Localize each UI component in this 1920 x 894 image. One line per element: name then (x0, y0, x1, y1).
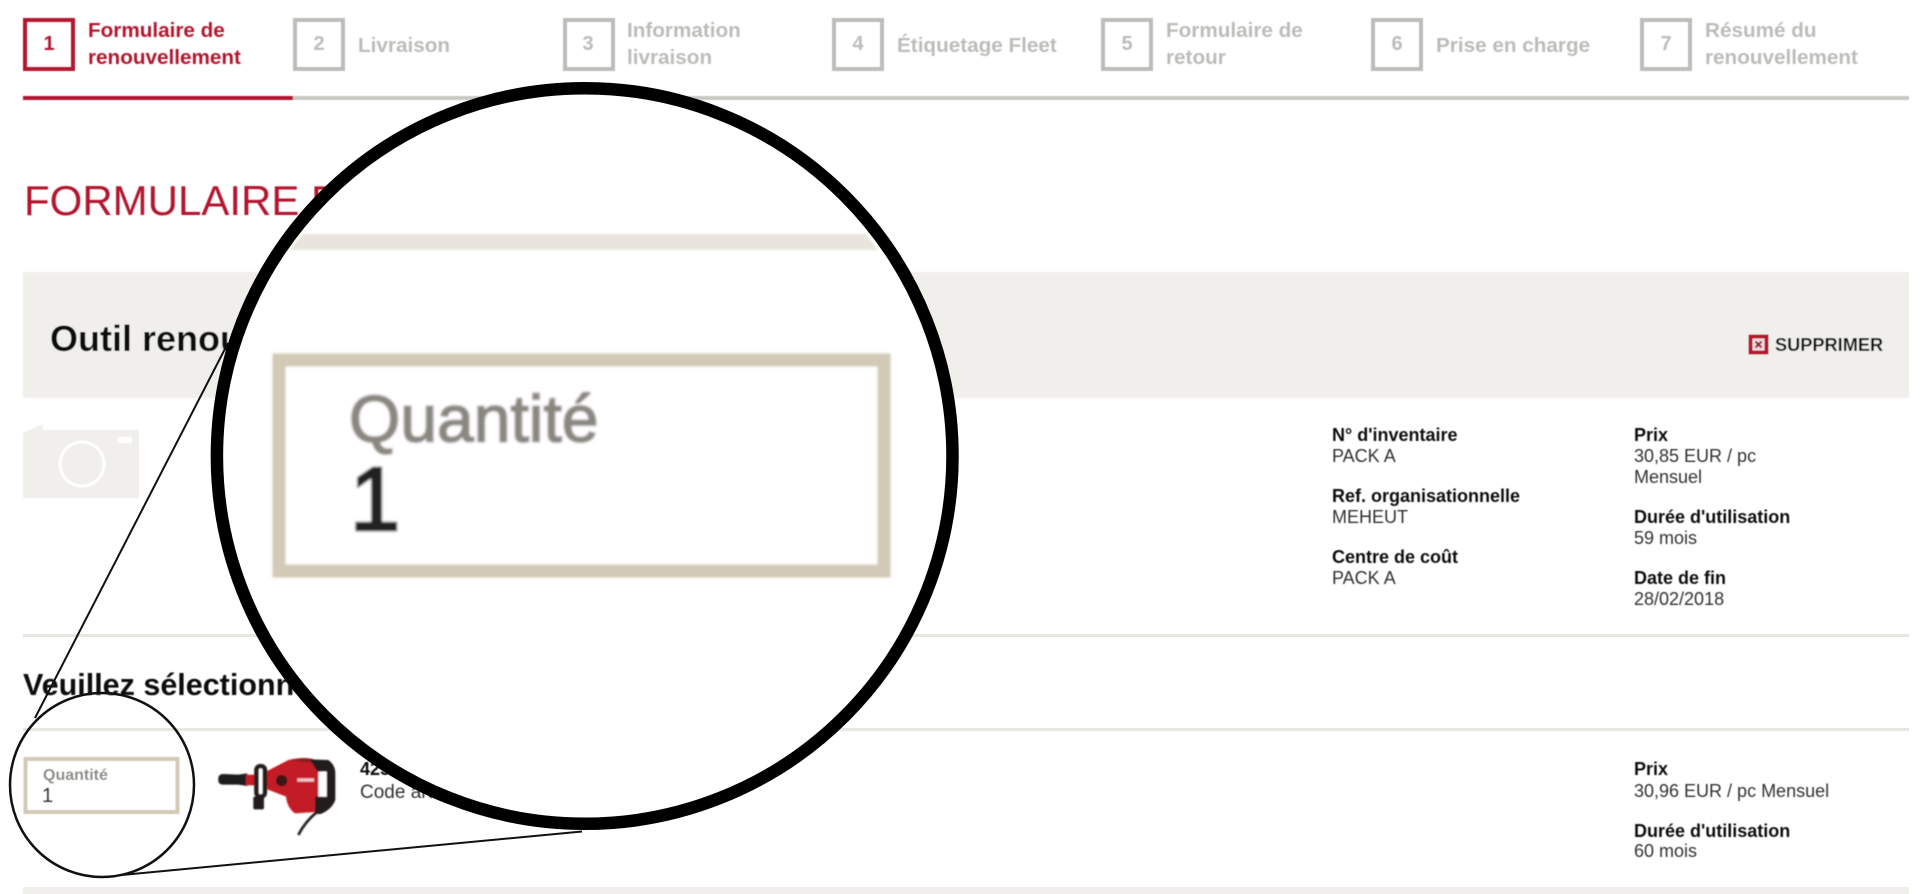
product price details: Durée d'utilisation (1634, 821, 1790, 841)
step 4 (834, 20, 1057, 69)
tool price column: Mensuel (1634, 467, 1702, 487)
step 6: 6 (1391, 33, 1403, 55)
tool details column: MEHEUT (1332, 507, 1408, 527)
tool price column: 30,85 EUR / pc (1634, 446, 1756, 466)
step 1 active: Formulaire de (88, 19, 225, 42)
quantity field (26, 759, 178, 812)
tool details column: Centre de coût (1332, 547, 1458, 567)
tool details column (1332, 425, 1520, 588)
tool details column: PACK A (1332, 568, 1396, 588)
product price details: Prix (1634, 759, 1668, 779)
panel: tool header (23, 272, 1909, 398)
step 1 active: 1 (43, 33, 55, 55)
small lens circle (10, 693, 194, 877)
section heading: Veuillez sélectionner (23, 668, 323, 702)
magnified quantity field: Quantité (349, 382, 598, 456)
step 5: retour (1166, 46, 1226, 69)
step 3: livraison (627, 46, 712, 69)
step 6 (1373, 20, 1590, 69)
tool price column: 59 mois (1634, 528, 1697, 548)
step 1 active (25, 19, 241, 69)
panel heading: Outil renouvelé (50, 318, 312, 359)
product price details: 30,96 EUR / pc Mensuel (1634, 781, 1829, 801)
progress bar (23, 96, 1909, 100)
step 5 (1103, 19, 1303, 69)
tool price column: Prix (1634, 425, 1668, 445)
step 1 active: renouvellement (88, 46, 241, 69)
magnifier lens (217, 88, 952, 824)
step 2: 2 (313, 33, 325, 55)
step 3 (565, 19, 741, 69)
tool price column: 28/02/2018 (1634, 589, 1724, 609)
page title: FORMULAIRE DE RENOUVELLEMENT (24, 177, 782, 224)
step 7 (1642, 19, 1858, 69)
step 3: 3 (582, 33, 594, 55)
step 2: Livraison (358, 34, 450, 57)
tool details column: N° d'inventaire (1332, 425, 1458, 445)
tool details column: Ref. organisationnelle (1332, 486, 1520, 506)
delete action: SUPPRIMER (1775, 335, 1883, 355)
product name: Code article (360, 782, 461, 803)
magnifier connector lines (35, 343, 582, 875)
step 7: renouvellement (1705, 46, 1858, 69)
product name: 425 (360, 759, 390, 779)
tool details column: PACK A (1332, 446, 1396, 466)
product price details (1634, 759, 1829, 861)
icon: camera placeholder (23, 424, 139, 498)
step 4: 4 (852, 33, 864, 55)
tool price column: Date de fin (1634, 568, 1726, 588)
tool price column (1634, 425, 1790, 609)
step 3: Information (627, 19, 741, 42)
next panel strip (23, 887, 1909, 894)
step 2 (295, 20, 450, 69)
step 5: Formulaire de (1166, 19, 1303, 42)
step 6: Prise en charge (1436, 34, 1590, 57)
step 5: 5 (1121, 33, 1133, 55)
step 7: 7 (1660, 33, 1672, 55)
tool price column: Durée d'utilisation (1634, 507, 1790, 527)
magnified quantity field (279, 360, 884, 571)
product price details: 60 mois (1634, 841, 1697, 861)
step 4: Étiquetage Fleet (897, 34, 1057, 57)
magnified quantity field: 1 (350, 450, 400, 550)
quantity field: Quantité (43, 767, 108, 784)
icon: red demolition hammer (218, 758, 335, 835)
quantity field: 1 (42, 785, 53, 807)
product name (360, 759, 461, 803)
step 7: Résumé du (1705, 19, 1817, 42)
magnified strip (290, 234, 878, 250)
step progress navigation (23, 19, 1909, 100)
